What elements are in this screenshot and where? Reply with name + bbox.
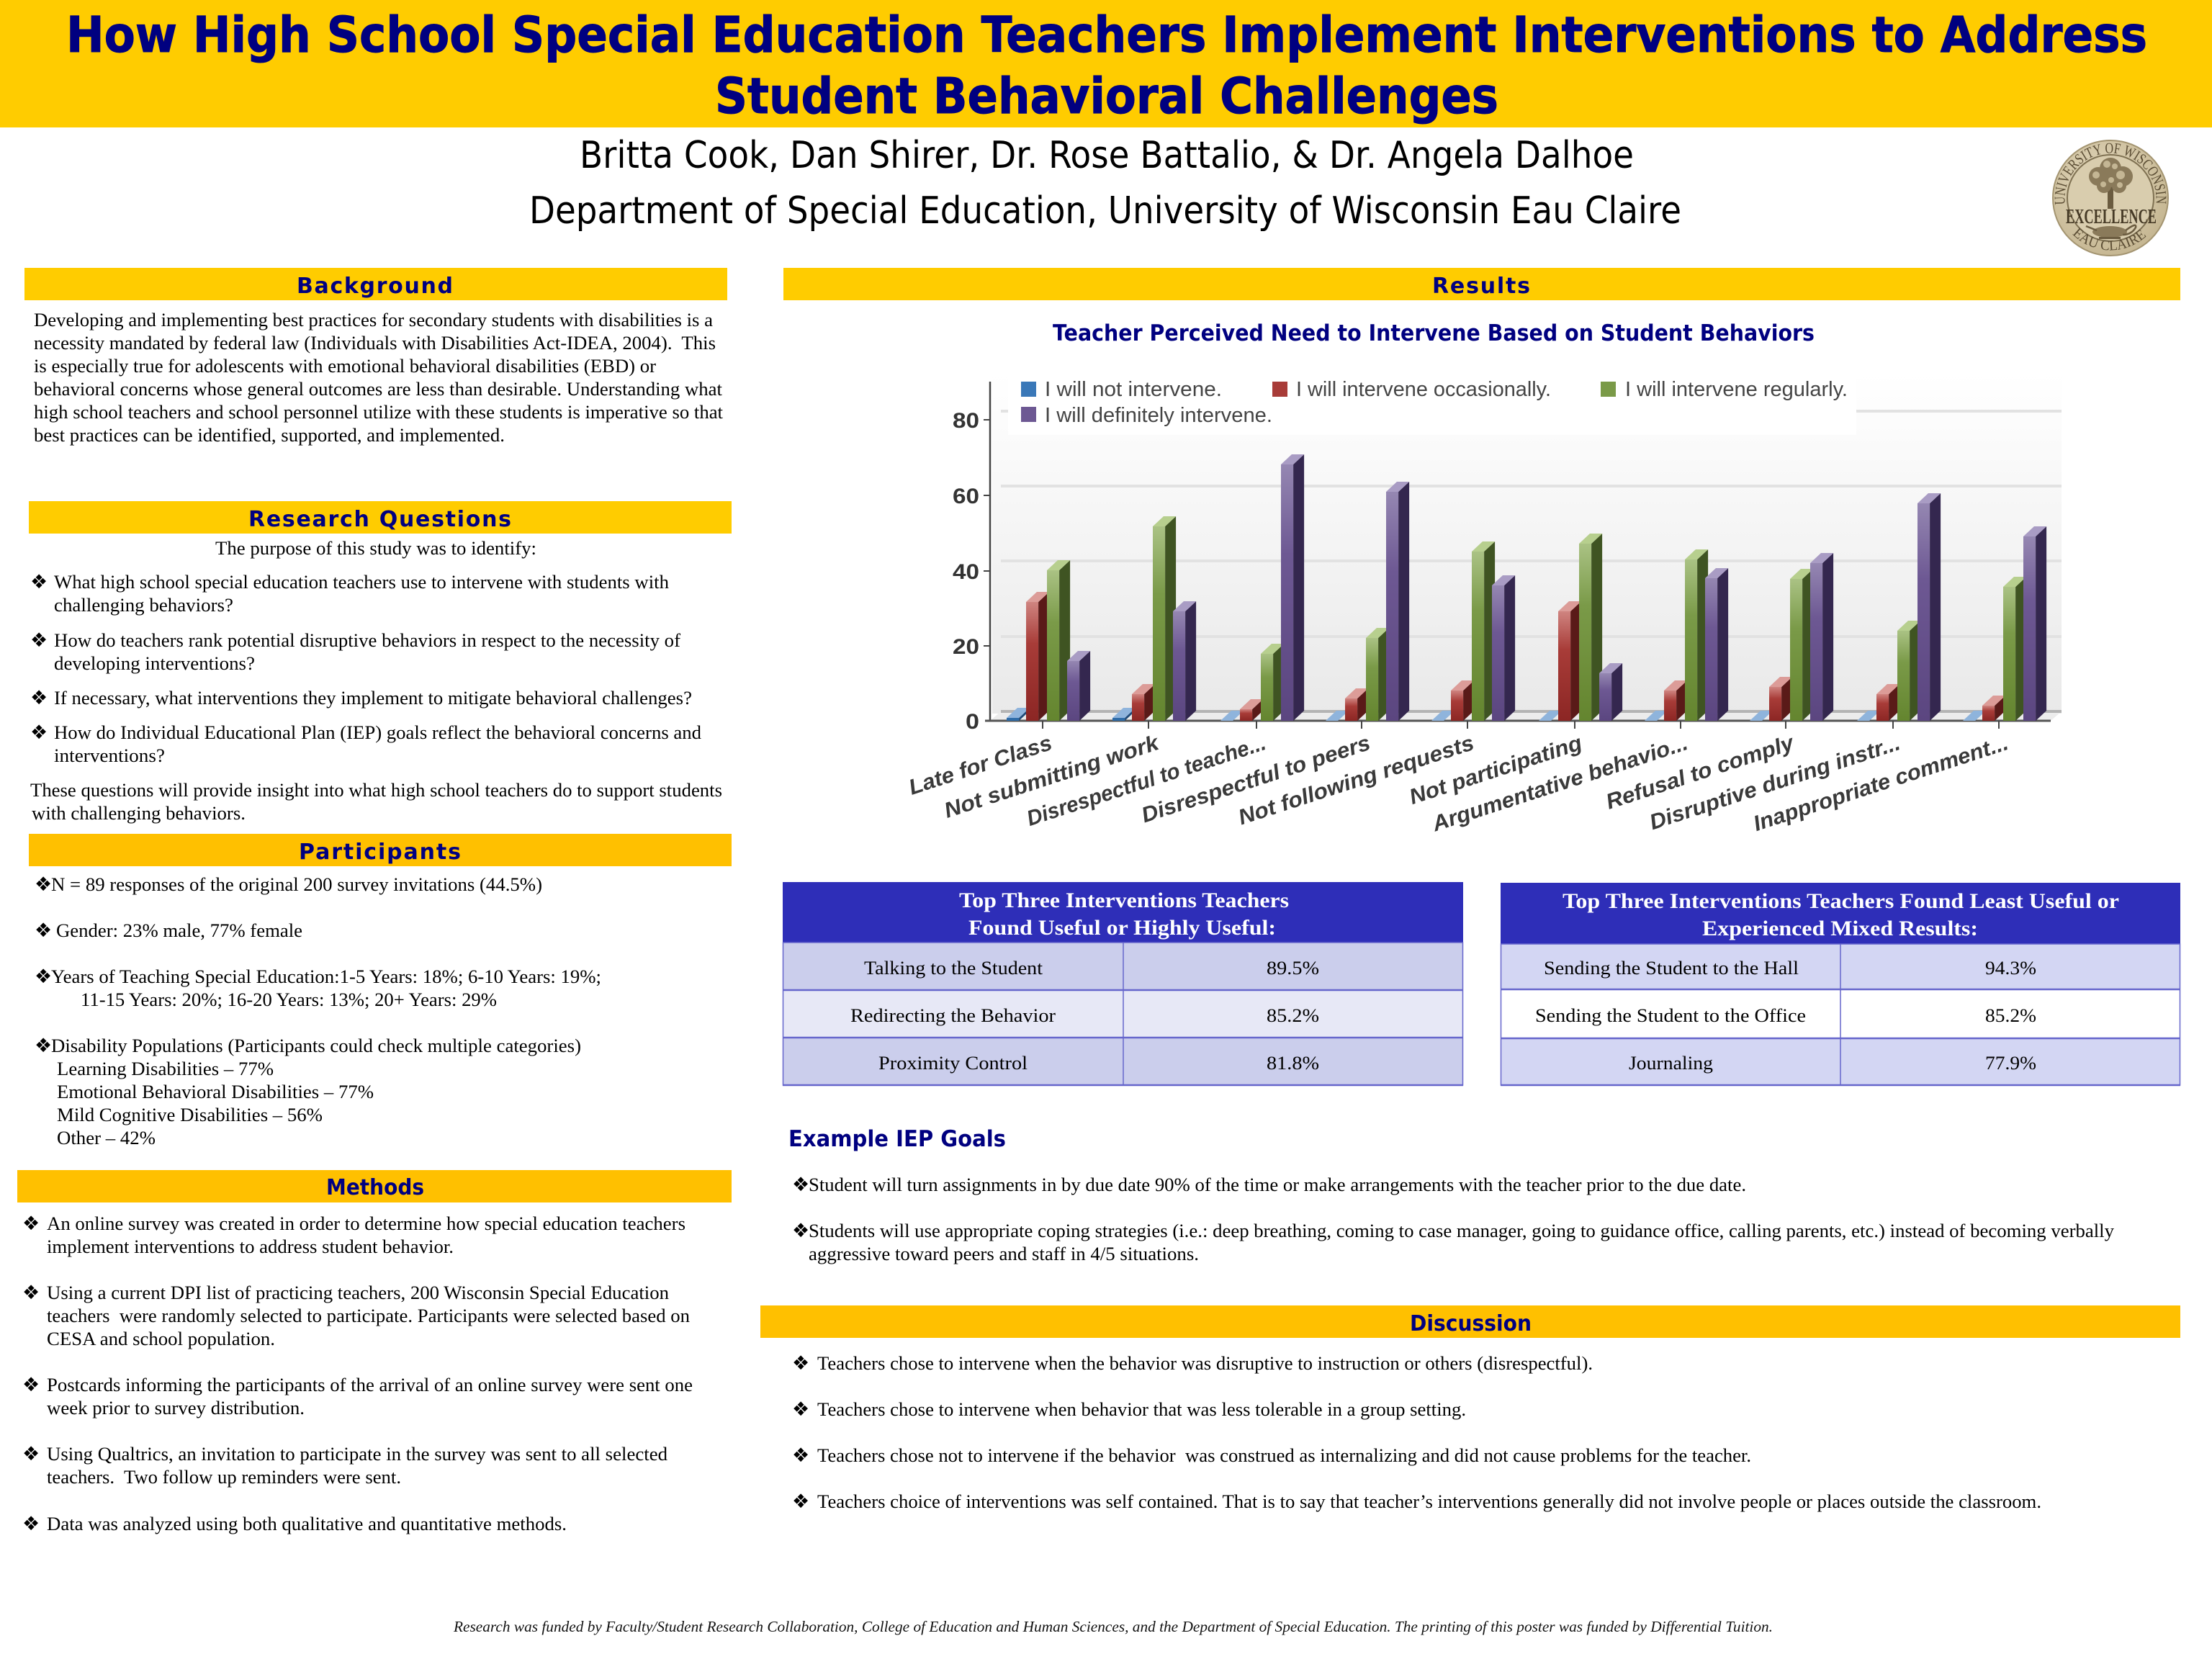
text block: methods list: week prior to survey distribution. (47, 1397, 305, 1419)
heading: participants (29, 834, 732, 866)
table: least useful interventions: Top Three Interventions Teachers Found Least Useful or (1563, 889, 2119, 913)
text block: participants details: Other – 42% (57, 1127, 156, 1148)
icon: university seal (2052, 140, 2169, 256)
bars: Refusal to comply (1750, 553, 1833, 721)
text block: discussion list: Teachers chose to intervene when behavior that was less tolerable in a group setting. (817, 1398, 1466, 1420)
text block: participants details: Emotional Behavioral Disabilities – 77% (57, 1081, 374, 1102)
text block: research questions list: developing interventions? (54, 652, 255, 674)
authors and department: Britta Cook, Dan Shirer, Dr. Rose Battalio, & Dr. Angela Dalhoe (580, 134, 1634, 177)
icon: university seal: EXCELLENCE (2066, 205, 2157, 228)
legend: I will intervene occasionally. (1296, 378, 1551, 401)
text block: research questions list: ❖ (30, 571, 48, 593)
text block: methods list (22, 1213, 693, 1535)
heading: research questions (29, 501, 732, 534)
heading: discussion: Discussion (1410, 1311, 1532, 1336)
text block: discussion list: ❖ (792, 1491, 809, 1513)
y axis labels: 0 (966, 710, 979, 734)
text block: research questions list: If necessary, what interventions they implement to mitigate behavioral challenges? (54, 687, 692, 709)
y axis labels (953, 409, 1999, 734)
text block: participants details: 11-15 Years: 20%; 16-20 Years: 13%; 20+ Years: 29% (81, 989, 497, 1010)
legend: I will intervene regularly. (1625, 378, 1848, 401)
text block: methods list: Using a current DPI list of practicing teachers, 200 Wisconsin Special Education (47, 1282, 669, 1303)
y axis labels: 40 (953, 560, 979, 584)
text block: methods list: Postcards informing the participants of the arrival of an online survey were sent one (47, 1374, 693, 1395)
table: most useful interventions: 89.5% (1267, 957, 1319, 979)
heading: methods (17, 1170, 732, 1202)
x axis category labels: Not following requests (1236, 731, 1477, 830)
panel: results heading (783, 268, 2180, 300)
panel: background (24, 268, 727, 446)
text block: IEP goals list: ❖ (792, 1220, 809, 1242)
footer: funding note: Research was funded by Faculty/Student Research Collaboration, College of Education and Human Sciences, and the Department of Special Education. The printing of this poster was funded by Differential Tuition. (453, 1618, 1773, 1635)
text block: discussion list: Teachers chose to intervene when the behavior was disruptive to instruction or others (disrespectful). (817, 1352, 1593, 1374)
text block: methods list: An online survey was created in order to determine how special education teachers (47, 1213, 685, 1234)
y axis labels: 60 (953, 485, 979, 508)
x axis category labels (906, 731, 2011, 837)
icon: university seal: EAU CLAIRE (2072, 228, 2146, 251)
table: least useful interventions (1501, 883, 2180, 1085)
bars: Not following requests (1431, 541, 1515, 721)
text block: research questions list: How do teachers rank potential disruptive behaviors in respect to the necessity of (54, 629, 680, 651)
table: least useful interventions: 77.9% (1985, 1052, 2036, 1074)
text block: methods list: Using Qualtrics, an invitation to participate in the survey was sent to all selected (47, 1443, 667, 1465)
x axis category labels: Not submitting work (941, 731, 1163, 823)
text block: methods list: ❖ (22, 1374, 40, 1396)
text block: participants details: N = 89 responses of the original 200 survey invitations (44.5%) (51, 873, 542, 895)
bars: Not submitting work (1112, 516, 1196, 721)
text block: research questions list: These questions will provide insight into what high school teachers do to support students (30, 779, 722, 801)
text block: participants details: Gender: 23% male, 77% female (56, 920, 302, 941)
y axis labels: 20 (953, 635, 979, 659)
heading: background (24, 268, 727, 300)
x axis category labels: Inappropriate comment... (1750, 731, 2011, 836)
table: most useful interventions: Redirecting the Behavior (850, 1004, 1056, 1026)
heading: example IEP goals: Example IEP Goals (788, 1126, 1006, 1152)
bars: Disrespectful to teachers (1220, 454, 1304, 721)
text block: research questions list: challenging behaviors? (54, 594, 233, 616)
heading: discussion (760, 1305, 2180, 1338)
text block: methods list: ❖ (22, 1213, 40, 1235)
chart title: Teacher Perceived Need to Intervene Based on Student Behaviors (1053, 320, 1815, 346)
panel: example IEP goals (788, 1126, 2115, 1264)
text block: methods list: Data was analyzed using both qualitative and quantitative methods. (47, 1513, 567, 1534)
x axis category labels: Disrespectful to teache... (1024, 731, 1269, 831)
panel: participants (29, 834, 732, 1148)
table: most useful interventions: 81.8% (1267, 1052, 1319, 1074)
x axis category labels: Disruptive during instr... (1647, 731, 1903, 835)
text block: participants details: ❖ (35, 966, 52, 988)
x axis category labels: Disrespectful to peers (1138, 731, 1373, 827)
table: least useful interventions: Journaling (1629, 1052, 1713, 1074)
bars: Not participating (1539, 534, 1622, 721)
text block: participants details: ❖ (35, 920, 52, 942)
text block: participants details: ❖ (35, 1035, 52, 1057)
table: most useful interventions: Talking to the Student (864, 957, 1043, 979)
authors and department: Department of Special Education, University of Wisconsin Eau Claire (529, 189, 1681, 233)
text block: discussion list: ❖ (792, 1398, 809, 1421)
table: most useful interventions: 85.2% (1267, 1004, 1319, 1026)
text block: discussion list: ❖ (792, 1352, 809, 1375)
panel: results heading: Results (1432, 274, 1530, 299)
text block: methods list: ❖ (22, 1282, 40, 1304)
x axis category labels: Argumentative behavio... (1429, 731, 1691, 837)
text block: participants details: ❖ (35, 873, 52, 896)
title banner: Student Behavioral Challenges (715, 68, 1498, 125)
text block: background paragraph: high school teachers and school personnel utilize with these students is imperative so that (34, 401, 724, 423)
bars: Late for Class (1007, 560, 1090, 721)
panel: methods (17, 1170, 732, 1535)
text block: background paragraph (34, 309, 724, 446)
heading: participants: Participants (299, 840, 461, 865)
table: most useful interventions (783, 882, 1463, 1085)
table: most useful interventions: Proximity Control (878, 1052, 1028, 1074)
text block: methods list: teachers. Two follow up reminders were sent. (47, 1466, 401, 1488)
x axis category labels: Refusal to comply (1603, 731, 1797, 814)
text block: research questions list: How do Individual Educational Plan (IEP) goals reflect the behavioral concerns and (54, 721, 701, 743)
table: most useful interventions: Top Three Interventions Teachers (959, 889, 1289, 912)
legend (1008, 374, 1856, 435)
table: most useful interventions: Found Useful or Highly Useful: (968, 916, 1276, 940)
x axis category labels: Not participating (1406, 731, 1585, 809)
text block: research questions list: ❖ (30, 629, 48, 652)
bars: Disruptive during instruction (1857, 493, 1941, 721)
table: least useful interventions: 94.3% (1985, 957, 2036, 979)
text block: IEP goals list: Student will turn assignments in by due date 90% of the time or make arrangements with the teacher prior to the due date. (809, 1174, 1746, 1195)
text block: research questions list: interventions? (54, 745, 165, 766)
text block: research questions list: What high school special education teachers use to intervene with students with (54, 571, 669, 593)
y axis labels: 80 (953, 409, 979, 433)
text block: methods list: CESA and school population. (47, 1328, 275, 1349)
heading: methods: Methods (326, 1175, 424, 1200)
bars: Disrespectful to peers (1326, 482, 1409, 721)
heading: research questions: Research Questions (248, 507, 511, 532)
text block: methods list: ❖ (22, 1443, 40, 1465)
text block: participants details: Learning Disabilities – 77% (57, 1058, 274, 1079)
text block: participants details: Mild Cognitive Disabilities – 56% (57, 1104, 323, 1125)
text block: research questions list: The purpose of this study was to identify: (215, 537, 536, 559)
text block: discussion list (792, 1352, 2041, 1513)
panel: research questions (29, 501, 732, 824)
legend: I will definitely intervene. (1045, 404, 1272, 427)
text block: methods list: implement interventions to address student behavior. (47, 1236, 454, 1257)
bars: Inappropriate comments (1963, 526, 2046, 721)
panel: discussion (760, 1305, 2180, 1513)
icon: university seal: UNIVERSITY OF WISCONSIN (2055, 143, 2166, 204)
table: least useful interventions: 85.2% (1985, 1004, 2036, 1026)
table: least useful interventions: Sending the Student to the Office (1535, 1004, 1806, 1026)
text block: background paragraph: behavioral concerns whose general outcomes are less than desirable. Understanding what (34, 378, 723, 400)
x axis category labels: Late for Class (906, 731, 1055, 800)
text block: discussion list: ❖ (792, 1444, 809, 1467)
text block: background paragraph: is especially true for adolescents with emotional behavioral disabilities (EBD) or (34, 355, 656, 377)
text block: research questions list: ❖ (30, 687, 48, 709)
text block: IEP goals list: aggressive toward peers and staff in 4/5 situations. (809, 1243, 1199, 1264)
text block: background paragraph: Developing and implementing best practices for secondary students with disabilities is a (34, 309, 713, 331)
text block: background paragraph: best practices can be identified, supported, and implemented. (34, 424, 505, 446)
text block: IEP goals list: Students will use appropriate coping strategies (i.e.: deep breathing, coming to case manager, going to guidance office, calling parents, etc.) instead of becoming verbally (809, 1220, 2115, 1241)
bar chart: teacher perceived need to intervene (906, 374, 2062, 837)
text block: participants details (35, 873, 601, 1148)
text block: IEP goals list: ❖ (792, 1174, 809, 1196)
text block: research questions list (30, 537, 722, 824)
table: least useful interventions: Sending the Student to the Hall (1544, 957, 1799, 979)
text block: research questions list: ❖ (30, 721, 48, 744)
text block: background paragraph: necessity mandated by federal law (Individuals with Disabilities Act-IDEA, 2004). This (34, 332, 716, 354)
text block: participants details: Years of Teaching Special Education:1-5 Years: 18%; 6-10 Years: 19%; (51, 966, 601, 987)
text block: research questions list: with challenging behaviors. (32, 802, 246, 824)
table: least useful interventions: Experienced Mixed Results: (1702, 917, 1978, 940)
authors and department (529, 134, 1681, 233)
text block: discussion list: Teachers chose not to intervene if the behavior was construed as internalizing and did not cause problems for the teacher. (817, 1444, 1751, 1466)
text block: IEP goals list (792, 1174, 2115, 1264)
bars: Argumentative behavior (1645, 549, 1728, 721)
text block: discussion list: Teachers choice of interventions was self contained. That is to say that teacher’s interventions generally did not involve people or places outside the classroom. (817, 1491, 2041, 1512)
text block: methods list: teachers were randomly selected to participate. Participants were selected based on (47, 1305, 690, 1326)
legend: I will not intervene. (1045, 378, 1222, 401)
title banner (0, 0, 2212, 127)
text block: methods list: ❖ (22, 1513, 40, 1535)
text block: participants details: Disability Populations (Participants could check multiple categories) (51, 1035, 581, 1056)
heading: background: Background (297, 274, 453, 299)
